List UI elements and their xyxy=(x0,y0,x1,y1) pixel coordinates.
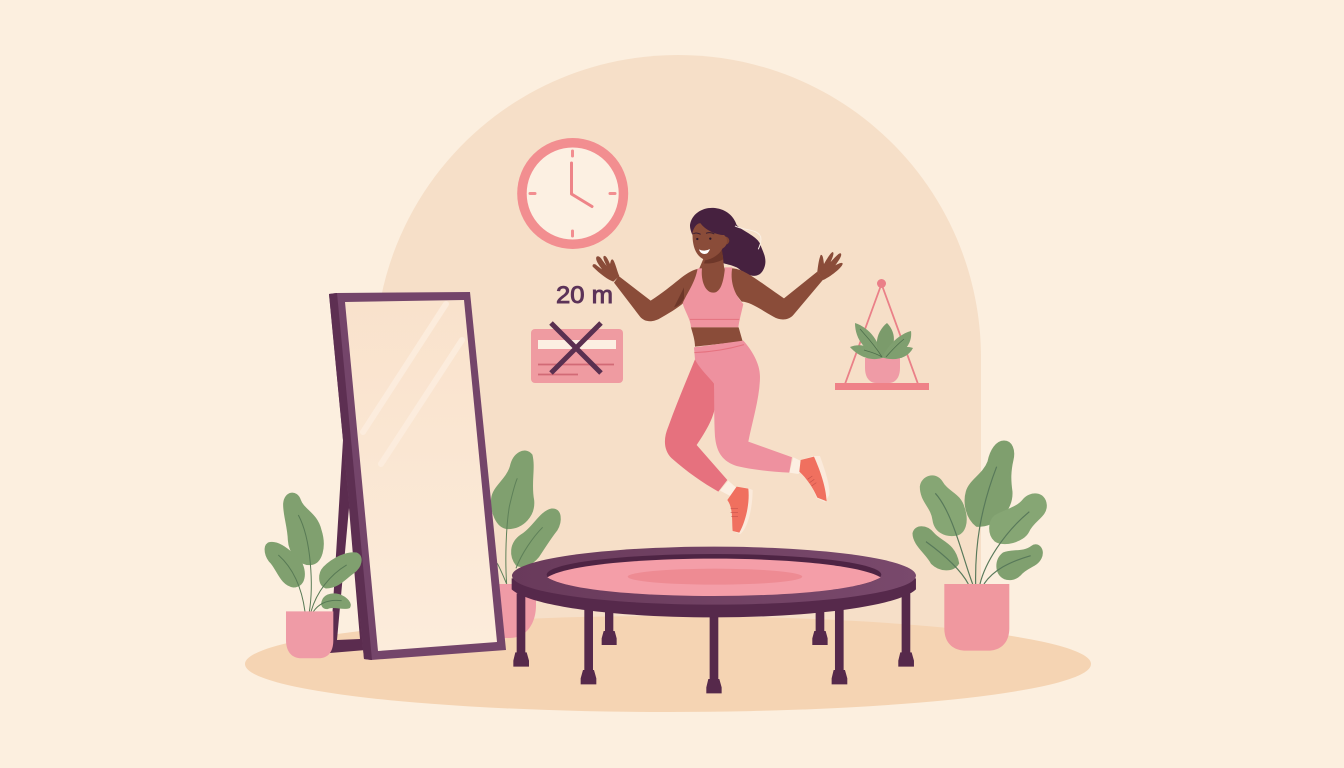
trampoline xyxy=(512,547,916,693)
mirror stand xyxy=(330,440,366,653)
plant left of mirror xyxy=(265,493,361,658)
mirror glass xyxy=(345,300,497,651)
duration label: 20 m xyxy=(556,282,613,309)
pot: middle plant xyxy=(490,584,536,638)
standing mirror xyxy=(329,292,506,660)
icon: crossed-out credit card xyxy=(531,323,623,383)
floor ellipse xyxy=(245,616,1091,712)
plant behind mirror xyxy=(490,451,560,638)
left arm xyxy=(614,269,700,321)
jumping woman xyxy=(593,208,843,534)
leaves: middle plant xyxy=(492,451,560,584)
left hand xyxy=(593,256,619,282)
ear xyxy=(721,237,729,245)
trampoline frame xyxy=(512,578,916,617)
socks xyxy=(720,481,738,499)
trampoline front legs xyxy=(513,593,529,667)
right shoe xyxy=(799,456,830,502)
trampoline back legs xyxy=(602,610,617,645)
hair back xyxy=(690,208,765,276)
left shoe xyxy=(727,487,753,534)
dark leg xyxy=(665,359,727,492)
neck and chest xyxy=(698,255,725,295)
arch wall backdrop xyxy=(375,55,981,640)
light leg and waistband xyxy=(694,341,792,473)
wall clock xyxy=(517,138,628,249)
trampoline mat xyxy=(547,559,881,596)
face xyxy=(693,223,727,260)
mirror frame xyxy=(329,292,506,660)
mirror reflections xyxy=(363,304,462,464)
plant right of trampoline xyxy=(913,441,1046,651)
hanging wall shelf with plant xyxy=(835,279,929,390)
midriff xyxy=(691,327,743,347)
right hand xyxy=(817,252,843,280)
right arm xyxy=(730,268,823,319)
sports top xyxy=(683,267,743,327)
